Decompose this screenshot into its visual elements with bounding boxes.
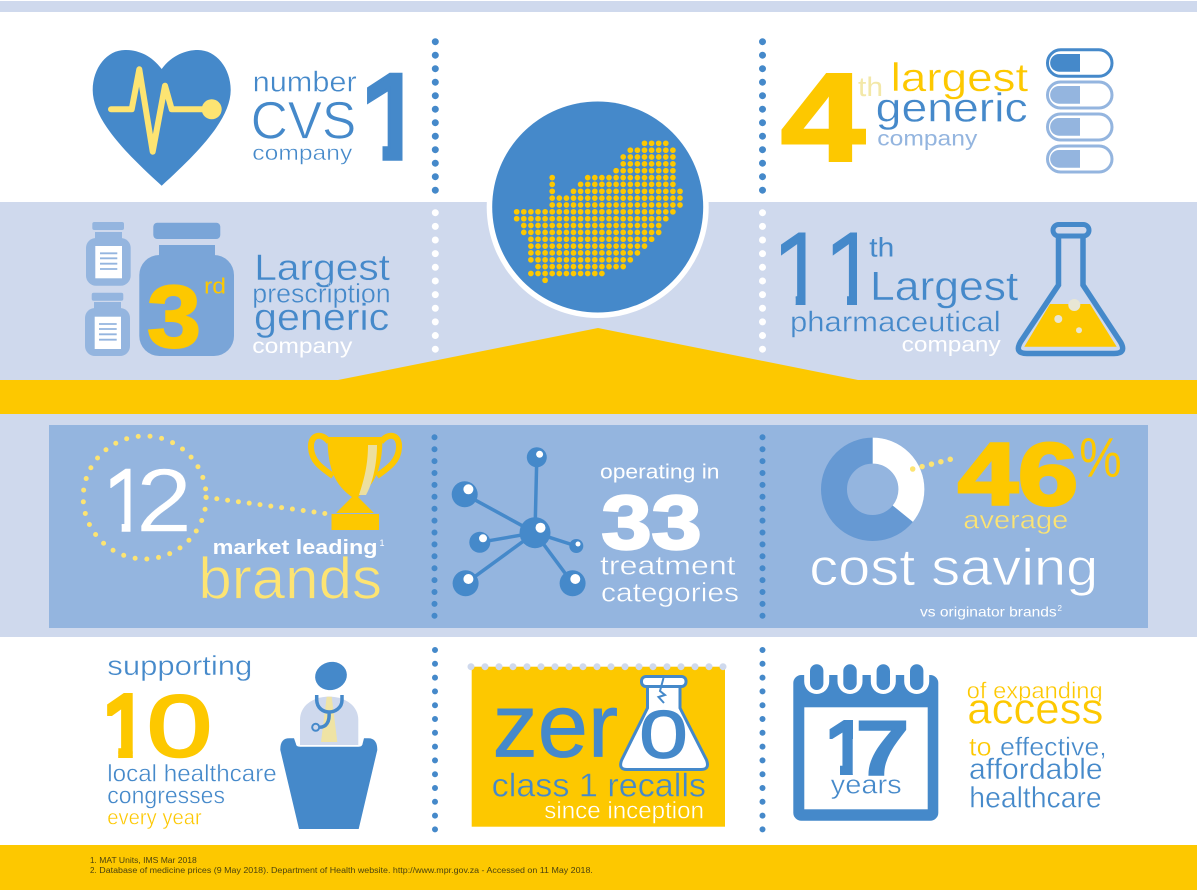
text: 4th largest generic company — [781, 48, 1028, 188]
text: operating in 33 treatment categories: 33 — [602, 480, 702, 566]
text: number CVS company 1: number — [253, 67, 357, 99]
text: 46% average cost saving — [809, 424, 1122, 620]
text: 46% average cost saving: vs originator brands — [920, 604, 1057, 620]
icon: dotted circle with 12: 2 — [136, 452, 192, 552]
icon: stacked capsules — [1048, 50, 1112, 172]
text: 11th Largest pharmaceutical company: 1 — [824, 212, 882, 328]
icon: doctor at podium — [280, 658, 377, 829]
text: supporting 10 local healthcare congresses every year: 0 — [147, 678, 212, 775]
text: supporting 10 local healthcare congresses every year — [102, 650, 277, 829]
text: zero class 1 recalls since inception: zer — [493, 677, 618, 777]
footnotes: 1. — [90, 856, 97, 865]
text: 46% average cost saving: % — [1079, 426, 1122, 488]
footnotes: 2. — [90, 866, 97, 875]
text: 46% average cost saving: average — [963, 504, 1068, 534]
text: supporting 10 local healthcare congresses every year: local healthcare — [107, 761, 277, 788]
text: operating in 33 treatment categories — [600, 461, 739, 608]
text: 4th largest generic company: generic — [876, 85, 1028, 131]
dotted column divider: middle right — [760, 437, 766, 616]
icon: medicine jars: rd — [204, 273, 226, 298]
icon: medicine jars: 3 — [147, 267, 201, 366]
chart: cost saving donut — [834, 451, 911, 528]
text: operating in 33 treatment categories: categories — [601, 578, 739, 608]
text: of expanding access to effective, affordable healthcare: healthcare — [969, 782, 1102, 815]
icon: dotted circle with 12: 1 — [102, 452, 153, 552]
icon: molecule network — [452, 447, 586, 596]
panel: lower stats background — [49, 425, 1148, 628]
text: number CVS company 1 — [253, 70, 402, 164]
text: operating in 33 treatment categories: operating in — [600, 461, 720, 483]
text: number CVS company 1: 1 — [360, 49, 430, 188]
text: Largest prescription generic company: generic — [254, 297, 389, 339]
text: 46% average cost saving: 2 — [1058, 604, 1062, 613]
text: zero class 1 recalls since inception: class 1 recalls — [492, 767, 706, 804]
icon: South Africa dot map in circle — [492, 102, 703, 312]
footnotes: MAT Units, IMS Mar 2018 — [99, 856, 197, 865]
text: zero class 1 recalls since inception: o — [638, 678, 688, 776]
text: 11th Largest pharmaceutical company: 1 — [772, 212, 830, 328]
text: zero class 1 recalls since inception — [492, 677, 706, 824]
icon: calendar 17 years: years — [831, 769, 902, 799]
text: Largest prescription generic company: prescription — [252, 279, 391, 309]
text: of expanding access to effective, affordable healthcare — [967, 677, 1107, 815]
icon: calendar 17 years — [793, 660, 938, 821]
text: operating in 33 treatment categories: treatment — [600, 550, 736, 580]
text: zero class 1 recalls since inception: since inception — [544, 797, 704, 824]
text: Largest prescription generic company — [252, 247, 391, 358]
icon: trophy — [311, 436, 399, 530]
text: market leading brands: 1 — [380, 538, 385, 548]
dotted column divider: bottom right — [760, 650, 766, 830]
yellow chevron band — [0, 328, 1197, 414]
footnotes: Database of medicine prices (9 May 2018). Department of Health website. http://www.mpr.gov.za - Accessed on 11 May 2018. — [99, 866, 593, 875]
text: of expanding access to effective, affordable healthcare: affordable — [969, 753, 1103, 786]
icon: calendar 17 years: 7 — [856, 704, 910, 792]
icon: conical flask with yellow liquid — [1018, 224, 1123, 354]
text: number CVS company 1: CVS — [251, 91, 356, 150]
text: supporting 10 local healthcare congresses every year: 1 — [102, 678, 152, 778]
dotted connector from donut — [913, 459, 950, 469]
text: 46% average cost saving: 46 — [958, 424, 1078, 524]
panel: zero recalls note — [471, 667, 725, 827]
icon: white ring behind map circle — [487, 96, 709, 318]
dotted column divider: middle left — [432, 437, 438, 616]
text: 11th Largest pharmaceutical company: pharmaceutical — [790, 307, 1001, 339]
dotted connector to trophy — [206, 497, 325, 514]
text: 11th Largest pharmaceutical company — [781, 232, 1018, 356]
text: Largest prescription generic company: Largest — [254, 247, 391, 288]
text: market leading brands: brands — [198, 546, 382, 611]
text: supporting 10 local healthcare congresses every year: supporting — [107, 650, 252, 681]
text: of expanding access to effective, affordable healthcare: access — [967, 684, 1103, 733]
text: 4th largest generic company: th — [858, 72, 883, 102]
text: 4th largest generic company: largest — [891, 56, 1028, 100]
icon: medicine jars — [85, 222, 234, 366]
text: of expanding access to effective, affordable healthcare: to — [969, 732, 992, 762]
icon: dotted circle with 12 — [83, 436, 206, 559]
text: 4th largest generic company: 4 — [781, 48, 865, 188]
icon: heart with pulse — [93, 50, 231, 186]
text: of expanding access to effective, affordable healthcare: effective, — [1000, 732, 1107, 762]
dotted column divider: upper right — [759, 42, 766, 349]
text: Largest prescription generic company: company — [252, 335, 353, 358]
text: market leading brands: market leading — [213, 537, 378, 559]
text: 11th Largest pharmaceutical company: th — [869, 233, 894, 263]
text: 4th largest generic company: company — [877, 128, 978, 151]
text: supporting 10 local healthcare congresses every year: every year — [107, 806, 202, 829]
footnotes — [90, 856, 593, 875]
dotted column divider: upper left — [432, 42, 439, 349]
dotted column divider: bottom left — [432, 650, 438, 830]
text: 46% average cost saving: cost saving — [809, 539, 1098, 597]
text: supporting 10 local healthcare congresses every year: congresses — [107, 782, 225, 809]
icon: cracked flask — [621, 676, 707, 770]
text: 11th Largest pharmaceutical company: Largest — [870, 263, 1019, 309]
icon: calendar 17 years: 1 — [826, 704, 869, 792]
text: 11th Largest pharmaceutical company: company — [902, 334, 1001, 357]
text: number CVS company 1: company — [252, 142, 353, 165]
text: of expanding access to effective, affordable healthcare: of expanding — [967, 677, 1103, 703]
